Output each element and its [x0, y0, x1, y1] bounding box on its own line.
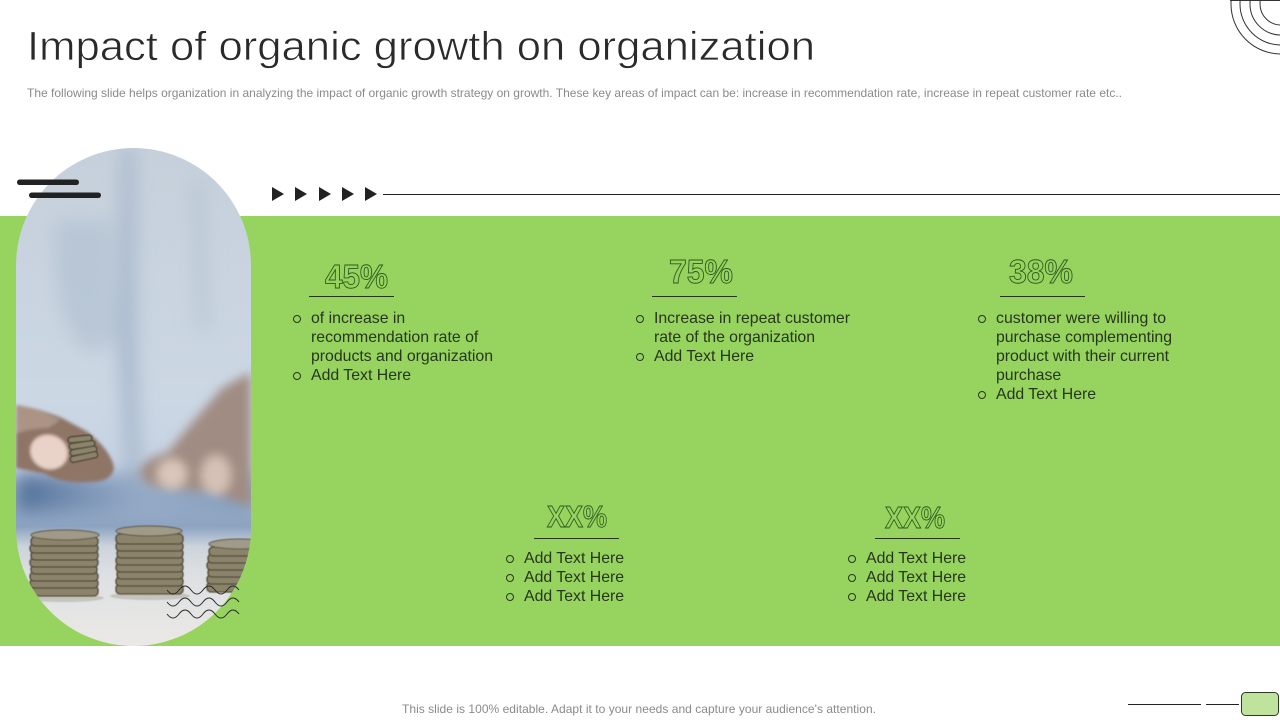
stat block: XX% left: Add Text Here	[524, 569, 624, 586]
stat block: 38%: product with their current	[996, 348, 1170, 365]
photo: hands stacking coins	[16, 148, 271, 646]
stat block: 75%: Add Text Here	[654, 348, 754, 365]
stat block: 38%: Add Text Here	[996, 386, 1096, 403]
stat block: XX% right: XX%	[885, 500, 945, 535]
title: Impact of organic growth on organization	[27, 23, 815, 69]
stat block: 75%: Increase in repeat customer	[654, 310, 851, 327]
stat block: 38%: purchase	[996, 367, 1061, 384]
sub: right blurred hand	[140, 372, 251, 508]
stat block: XX% left: Add Text Here	[524, 588, 624, 605]
footer note: This slide is 100% editable. Adapt it to your needs and capture your audience's attention.	[402, 702, 876, 716]
stat block: 38%: customer were willing to	[996, 310, 1166, 327]
sub: left hand holding coins	[16, 405, 114, 482]
stat block: XX% left: Add Text Here	[524, 550, 624, 567]
stat block: 45%: products and organization	[311, 348, 493, 365]
stat block: XX% right: Add Text Here	[866, 569, 966, 586]
stat block: 45%: Add Text Here	[311, 367, 411, 384]
stat block: 75%: rate of the organization	[654, 329, 815, 346]
stat block: 38%: purchase complementing	[996, 329, 1172, 346]
stat block: XX% left	[506, 499, 624, 605]
stat block: 45%: of increase in	[311, 310, 405, 327]
stat block: XX% left: XX%	[547, 499, 607, 534]
icon: corner concentric arcs	[1230, 0, 1280, 54]
stat block: 45%: recommendation rate of	[311, 329, 479, 346]
stat block: XX% right	[848, 500, 966, 605]
green band	[0, 216, 1280, 646]
stat block: 38%: 38%	[1009, 253, 1073, 290]
accent: wave lines	[167, 586, 239, 618]
stat block: 75%	[636, 253, 851, 365]
arrows and divider line	[272, 187, 1280, 201]
stat block: XX% right: Add Text Here	[866, 550, 966, 567]
stat block: 38%	[978, 253, 1172, 403]
accent: two dark bars	[17, 180, 101, 198]
footer lines and page tab	[1128, 692, 1278, 716]
subtitle: The following slide helps organization in analyzing the impact of organic growth strategy on growth. These key areas of impact can be: increase in recommendation rate, increase in repeat customer rate etc..	[27, 86, 1122, 100]
sub: coin stacks	[24, 526, 271, 602]
stat block: XX% right: Add Text Here	[866, 588, 966, 605]
stat block: 75%: 75%	[669, 253, 733, 290]
stat block: 45%: 45%	[325, 258, 388, 295]
stat block: 45%	[294, 258, 493, 384]
